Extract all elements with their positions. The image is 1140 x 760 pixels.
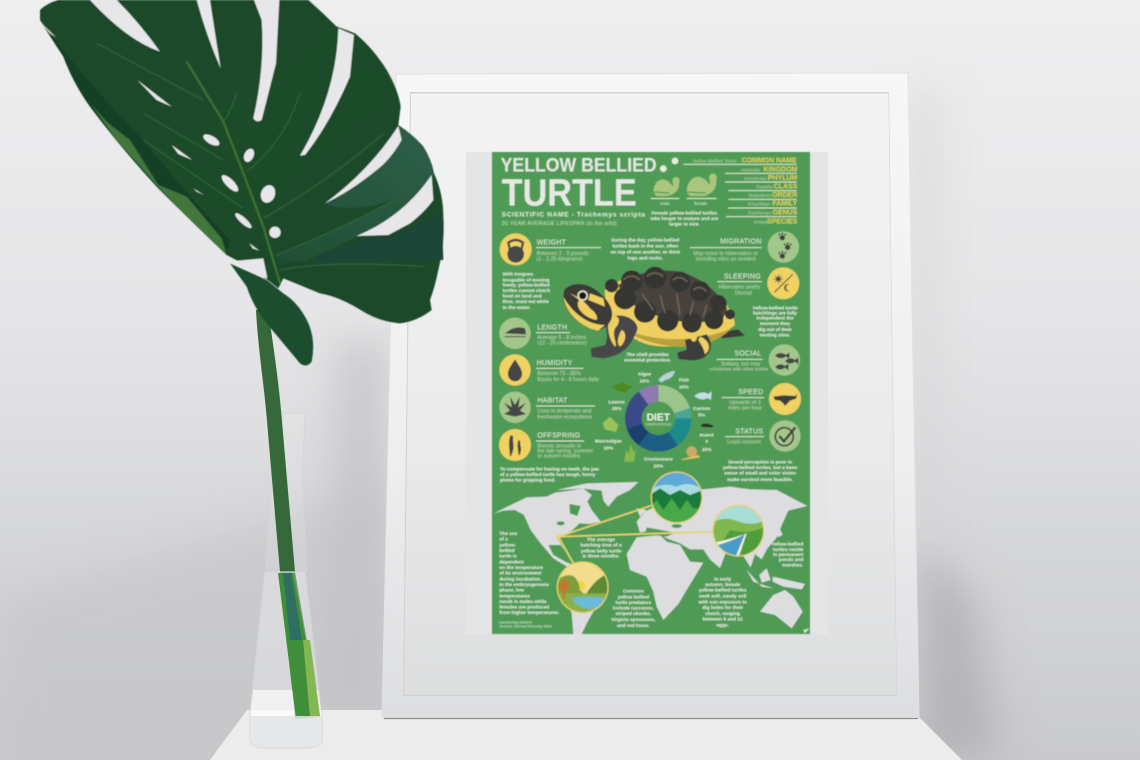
text: predators note: turtle predators xyxy=(615,600,651,606)
text: nesting note: eggs. xyxy=(716,624,730,629)
icon: herons xyxy=(499,429,531,461)
diet labels: Leaves xyxy=(608,399,625,405)
text: range note: marshes. xyxy=(782,563,804,569)
text: hatchling note: independent the xyxy=(756,316,794,322)
diet labels: Carrion xyxy=(693,406,710,412)
text: sex determination note: result in males while xyxy=(499,599,547,605)
text: jaw note: of a yellow-bellied turtle has tough, horny xyxy=(500,472,596,478)
monstera leaf xyxy=(40,0,444,365)
stat: weight: WEIGHT xyxy=(537,239,567,246)
diet labels xyxy=(595,372,714,469)
diet centre label: DIET xyxy=(647,412,671,423)
text: tongue note: incapable of moving xyxy=(503,277,549,283)
stat: migration: May move to hibernation or xyxy=(693,251,758,257)
text: sex determination note: The sex xyxy=(499,531,518,537)
stat: weight: (1 - 2.25 kilograms) xyxy=(537,256,583,262)
taxonomy list: KINGDOM xyxy=(764,166,798,173)
taxonomy list: FAMILY xyxy=(772,201,798,208)
diet labels: 10% xyxy=(603,445,614,451)
taxonomy list: GENUS xyxy=(772,209,798,216)
text: range note: Yellow-bellied xyxy=(771,541,803,547)
stat: weight: Between 2 - 5 pounds xyxy=(537,251,589,257)
small lower leaf lobe xyxy=(230,263,313,365)
stat: sleeping: Diurnal xyxy=(735,290,752,296)
poster header section xyxy=(500,156,799,265)
title: YELLOW BELLIED xyxy=(501,156,657,177)
turtle scutes xyxy=(605,267,735,333)
stat: status xyxy=(725,428,764,445)
turtle front leg xyxy=(591,315,637,358)
taxonomy list: PHYLUM xyxy=(768,175,798,182)
stat: migration xyxy=(690,239,762,262)
icon: aquatic plant xyxy=(499,392,531,423)
leaf blade xyxy=(40,0,444,323)
diet labels: Crustaceans xyxy=(644,457,673,463)
stat: offspring xyxy=(536,433,593,460)
text: hatchling note: Yellow-bellied turtle xyxy=(752,305,798,311)
taxonomy list: scripta xyxy=(754,219,769,225)
habitat circle: river xyxy=(712,505,765,558)
text: sex determination note: temperatures xyxy=(499,593,530,599)
text: hatching note: The average xyxy=(587,537,615,543)
stat: speed: Upwards of 3 xyxy=(729,400,761,406)
diet labels: 15% xyxy=(702,447,712,453)
turtle illustration xyxy=(563,267,745,360)
icon: checkmark xyxy=(769,420,801,452)
habitat circle: forest xyxy=(650,470,703,527)
shell ridge lines xyxy=(623,273,707,317)
taxonomy list: CLASS xyxy=(774,183,798,190)
icon: male turtle: male xyxy=(660,201,670,206)
text: sex determination note: females are produced xyxy=(499,605,549,611)
greenland xyxy=(557,482,638,507)
africa xyxy=(627,535,703,620)
text: range note: turtles reside xyxy=(773,547,804,553)
text: predators note: Common xyxy=(623,588,644,594)
diet labels: Fish xyxy=(679,378,689,384)
taxonomy list: Yellow Bellied Turtle xyxy=(692,159,737,165)
stat: length xyxy=(536,324,587,346)
text: range note: ponds and xyxy=(779,557,803,563)
subtitle xyxy=(502,212,645,227)
text: predators note: Virginia opossums, xyxy=(611,617,656,623)
text: sex determination note: from higher temperatures. xyxy=(499,610,560,616)
turtle back leg xyxy=(677,334,711,360)
icon: female turtle xyxy=(687,174,717,206)
frame bottom shadow line xyxy=(384,718,918,720)
text: hatchling note: hatchlings are fully xyxy=(753,311,797,317)
taxonomy list: ORDER xyxy=(772,192,797,199)
text: hatchling note: dig out of their xyxy=(758,327,792,333)
leaf dark band xyxy=(317,213,443,263)
stat: length: LENGTH xyxy=(537,324,567,331)
icon: paw prints xyxy=(768,231,799,263)
connector lines xyxy=(558,505,713,563)
text: senses note: sense of smell and color vision xyxy=(724,471,796,477)
stat: speed: SPEED xyxy=(738,389,763,396)
turtle tail xyxy=(710,329,745,338)
icon: sun and moon xyxy=(767,267,799,299)
stat: humidity heading xyxy=(536,360,583,368)
turtle shell rim xyxy=(605,273,735,347)
text: shell note: The shell provides xyxy=(626,352,669,358)
stat: speed xyxy=(722,389,764,411)
text: predators note: yellow bellied xyxy=(618,594,649,600)
stat: length: (12 - 20 centimeters) xyxy=(537,340,587,346)
stat: sleeping: Hibernates yearly xyxy=(719,284,760,290)
text: senses note: make survival more feasible. xyxy=(727,477,794,483)
stem in vase xyxy=(278,573,320,719)
frame mat xyxy=(404,94,896,695)
stat: length: Average 5 - 8 inches xyxy=(537,335,586,341)
stat: status: STATUS xyxy=(735,428,763,435)
text: jaw note: plates for gripping food. xyxy=(500,478,556,484)
text: shell note: essential protection. xyxy=(624,358,672,364)
icon: male turtle xyxy=(651,177,680,206)
islands xyxy=(637,508,809,633)
text: sex determination note: of a xyxy=(499,537,508,543)
stat: offspring: the late spring, summer xyxy=(537,448,593,454)
taxonomy list: Testudines xyxy=(748,193,772,199)
stat: sleeping xyxy=(717,273,762,296)
text: sex determination note: of its environment xyxy=(499,571,542,577)
text: basking note: During the day, yellow-bellied xyxy=(611,238,679,244)
diet labels: 20% xyxy=(653,463,664,469)
text: nesting note: yellow-bellied turtles xyxy=(699,588,747,594)
leaf midrib xyxy=(187,62,280,283)
diet donut chart xyxy=(623,383,693,453)
text: nesting note: clutch, ranging xyxy=(705,611,740,617)
icon: female turtle: female xyxy=(694,201,708,206)
stat: social xyxy=(709,351,769,372)
text: sex determination note: dependent xyxy=(499,559,524,565)
australia xyxy=(760,590,803,628)
stat: offspring: OFFSPRING xyxy=(537,433,580,440)
diet labels: Algae xyxy=(638,372,651,378)
wall shadow from the leaf and frame xyxy=(0,90,1000,760)
stat: habitat: freshwater ecosystems xyxy=(537,414,592,420)
text: tongue note: With tongues xyxy=(503,272,534,278)
text: sex determination note: on the temperature xyxy=(499,565,543,571)
icon: kettlebell xyxy=(500,233,532,265)
taxonomy list: Vertebrata xyxy=(744,176,767,182)
title: TURTLE xyxy=(502,173,637,215)
text: tongue note: in the water. xyxy=(503,305,531,311)
text: range note: in permanent xyxy=(773,552,804,558)
taxonomy list: Animalia xyxy=(740,167,760,173)
diet labels: Macroalgae xyxy=(595,438,622,444)
diet labels: s xyxy=(705,440,708,445)
leaf cuts xyxy=(40,0,433,278)
text: tongue note: thus, must eat while xyxy=(503,299,549,305)
text: basking note: turtles bask in the sun, often xyxy=(612,243,678,249)
title xyxy=(501,156,657,215)
north america xyxy=(494,489,601,568)
leaf dark left edge xyxy=(40,20,230,255)
leaf olive underside xyxy=(92,105,227,255)
text: female maturity note: take longer to mature and are xyxy=(651,216,718,222)
frame inner edge xyxy=(403,92,897,696)
diet labels: 5% xyxy=(698,413,706,419)
text: nesting note: between 8 and 12 xyxy=(703,617,743,623)
stat: social: SOCIAL xyxy=(734,351,762,358)
poster xyxy=(492,152,810,634)
taxonomy list: SPECIES xyxy=(767,218,798,225)
text: sex determination note: In the embryogenesis xyxy=(499,582,549,588)
text: female maturity note: Female yellow-bellied turtles xyxy=(651,211,718,217)
stat: migration: MIGRATION xyxy=(720,239,762,246)
icon: humidity xyxy=(499,354,531,386)
leaf veins xyxy=(97,43,423,270)
text: nesting note: seek soft, sandy soil xyxy=(699,593,746,599)
icon: fish group xyxy=(769,344,800,376)
turtle head xyxy=(563,284,612,331)
eurasia xyxy=(637,487,807,568)
text: sex determination note: turtle is xyxy=(499,554,517,560)
text: predators note: and red foxes. xyxy=(617,623,650,629)
diet donut chart: OMNIVOROUS xyxy=(646,423,672,427)
glass vase xyxy=(250,572,322,748)
stat: speed: miles per hour xyxy=(728,405,762,411)
text: source credit: Source: Animal Diversity Web xyxy=(499,624,553,629)
stat: habitat xyxy=(536,398,595,420)
diet labels: 10% xyxy=(639,378,650,384)
icon: small flowers xyxy=(660,158,678,172)
poster lower middle section xyxy=(499,371,801,484)
text: sex determination note: yellow- xyxy=(499,542,516,548)
stat: humidity text: Basks for 4 - 8 hours daily xyxy=(537,377,599,383)
text: predators note: striped skunks, xyxy=(616,611,652,617)
taxonomy list: COMMON NAME xyxy=(742,158,797,165)
taxonomy list: Emydidae xyxy=(748,202,770,208)
stat: humidity text: Between 75 - 85% xyxy=(537,371,581,377)
location dot xyxy=(556,535,561,540)
stat: habitat: Lives in temperate and xyxy=(537,409,591,415)
stat: habitat: HABITAT xyxy=(537,398,568,405)
text: nesting note: dig holes for their xyxy=(702,605,743,611)
text: tongue note: turtles cannot clutch xyxy=(503,288,550,294)
diet labels: 20% xyxy=(679,384,690,390)
text: hatching note: hatching time of a xyxy=(580,543,622,549)
poster background xyxy=(492,152,810,634)
icon: cheetah xyxy=(769,383,801,415)
poster backing band xyxy=(466,152,828,634)
text: sex determination note: bellied xyxy=(499,548,515,554)
text: hatchling note: nesting sites. xyxy=(760,332,791,338)
diet food icons xyxy=(603,371,713,462)
text: nesting note: with sun exposure to xyxy=(698,599,747,605)
stat: social: Solitary, but may xyxy=(721,362,761,368)
glass vase neck xyxy=(265,413,307,572)
picture frame xyxy=(382,73,919,718)
stat: offspring: Breeds annually in xyxy=(537,443,581,449)
stat: status: Least concern xyxy=(727,439,761,445)
stat: social: cohabitate with other turtles xyxy=(709,366,769,372)
text: jaw note: To compensate for having no teeth, the jaw xyxy=(500,466,599,472)
poster upper middle section xyxy=(499,267,800,386)
stat: offspring: or autumn months xyxy=(537,454,581,460)
icon: length turtle xyxy=(499,318,531,349)
stat: migration: breeding sites as needed xyxy=(696,256,755,262)
taxonomy list: Reptilia xyxy=(756,184,773,190)
plant stem xyxy=(256,308,320,719)
diet labels: 20% xyxy=(612,406,622,412)
text: nesting note: autumn, female xyxy=(705,582,741,588)
text: basking note: on top of one another, or thick xyxy=(611,249,680,255)
shelf xyxy=(210,710,962,760)
text: tongue note: freely, yellow-bellied xyxy=(503,283,550,289)
taxonomy list: Trachemys xyxy=(747,210,772,216)
text: tongue note: food on land and xyxy=(503,294,542,300)
vase base xyxy=(250,716,322,748)
text: sex determination note: during incubation. xyxy=(499,576,542,582)
text: hatchling note: moment they xyxy=(760,321,790,327)
world map xyxy=(494,482,809,634)
text: basking note: logs and rocks. xyxy=(628,255,664,261)
habitat circle: savanna xyxy=(557,561,610,615)
diet labels: Insect xyxy=(700,433,714,439)
text: senses note: Sound perception is poor in xyxy=(728,459,792,465)
text: nesting note: In early xyxy=(714,577,731,583)
turtle under-shell band xyxy=(622,328,732,347)
water in vase xyxy=(250,690,322,716)
poster map section xyxy=(494,470,809,634)
text: hatching note: is three months. xyxy=(582,554,620,560)
stat: sleeping: SLEEPING xyxy=(724,273,761,280)
taxonomy list xyxy=(683,158,798,225)
text: source credit: wandering wisdom xyxy=(499,619,533,624)
text: sex determination note: phase, low xyxy=(499,588,524,594)
south america xyxy=(558,563,607,634)
map water details xyxy=(557,504,682,537)
subtitle: 30 YEAR AVERAGE LIFESPAN (in the wild) xyxy=(502,221,617,227)
stat: weight xyxy=(536,239,601,262)
leaf lighter lobe xyxy=(277,126,433,263)
subtitle: SCIENTIFIC NAME - Trachemys scripta xyxy=(502,212,645,219)
text: female maturity note: larger in size. xyxy=(669,221,700,227)
stat: humidity heading: HUMIDITY xyxy=(537,360,573,367)
text: predators note: include raccoons, xyxy=(613,605,655,611)
text: senses note: yellow-bellied turtles, but a keen xyxy=(723,465,797,471)
text: hatching note: yellow belly turtle xyxy=(581,548,622,554)
